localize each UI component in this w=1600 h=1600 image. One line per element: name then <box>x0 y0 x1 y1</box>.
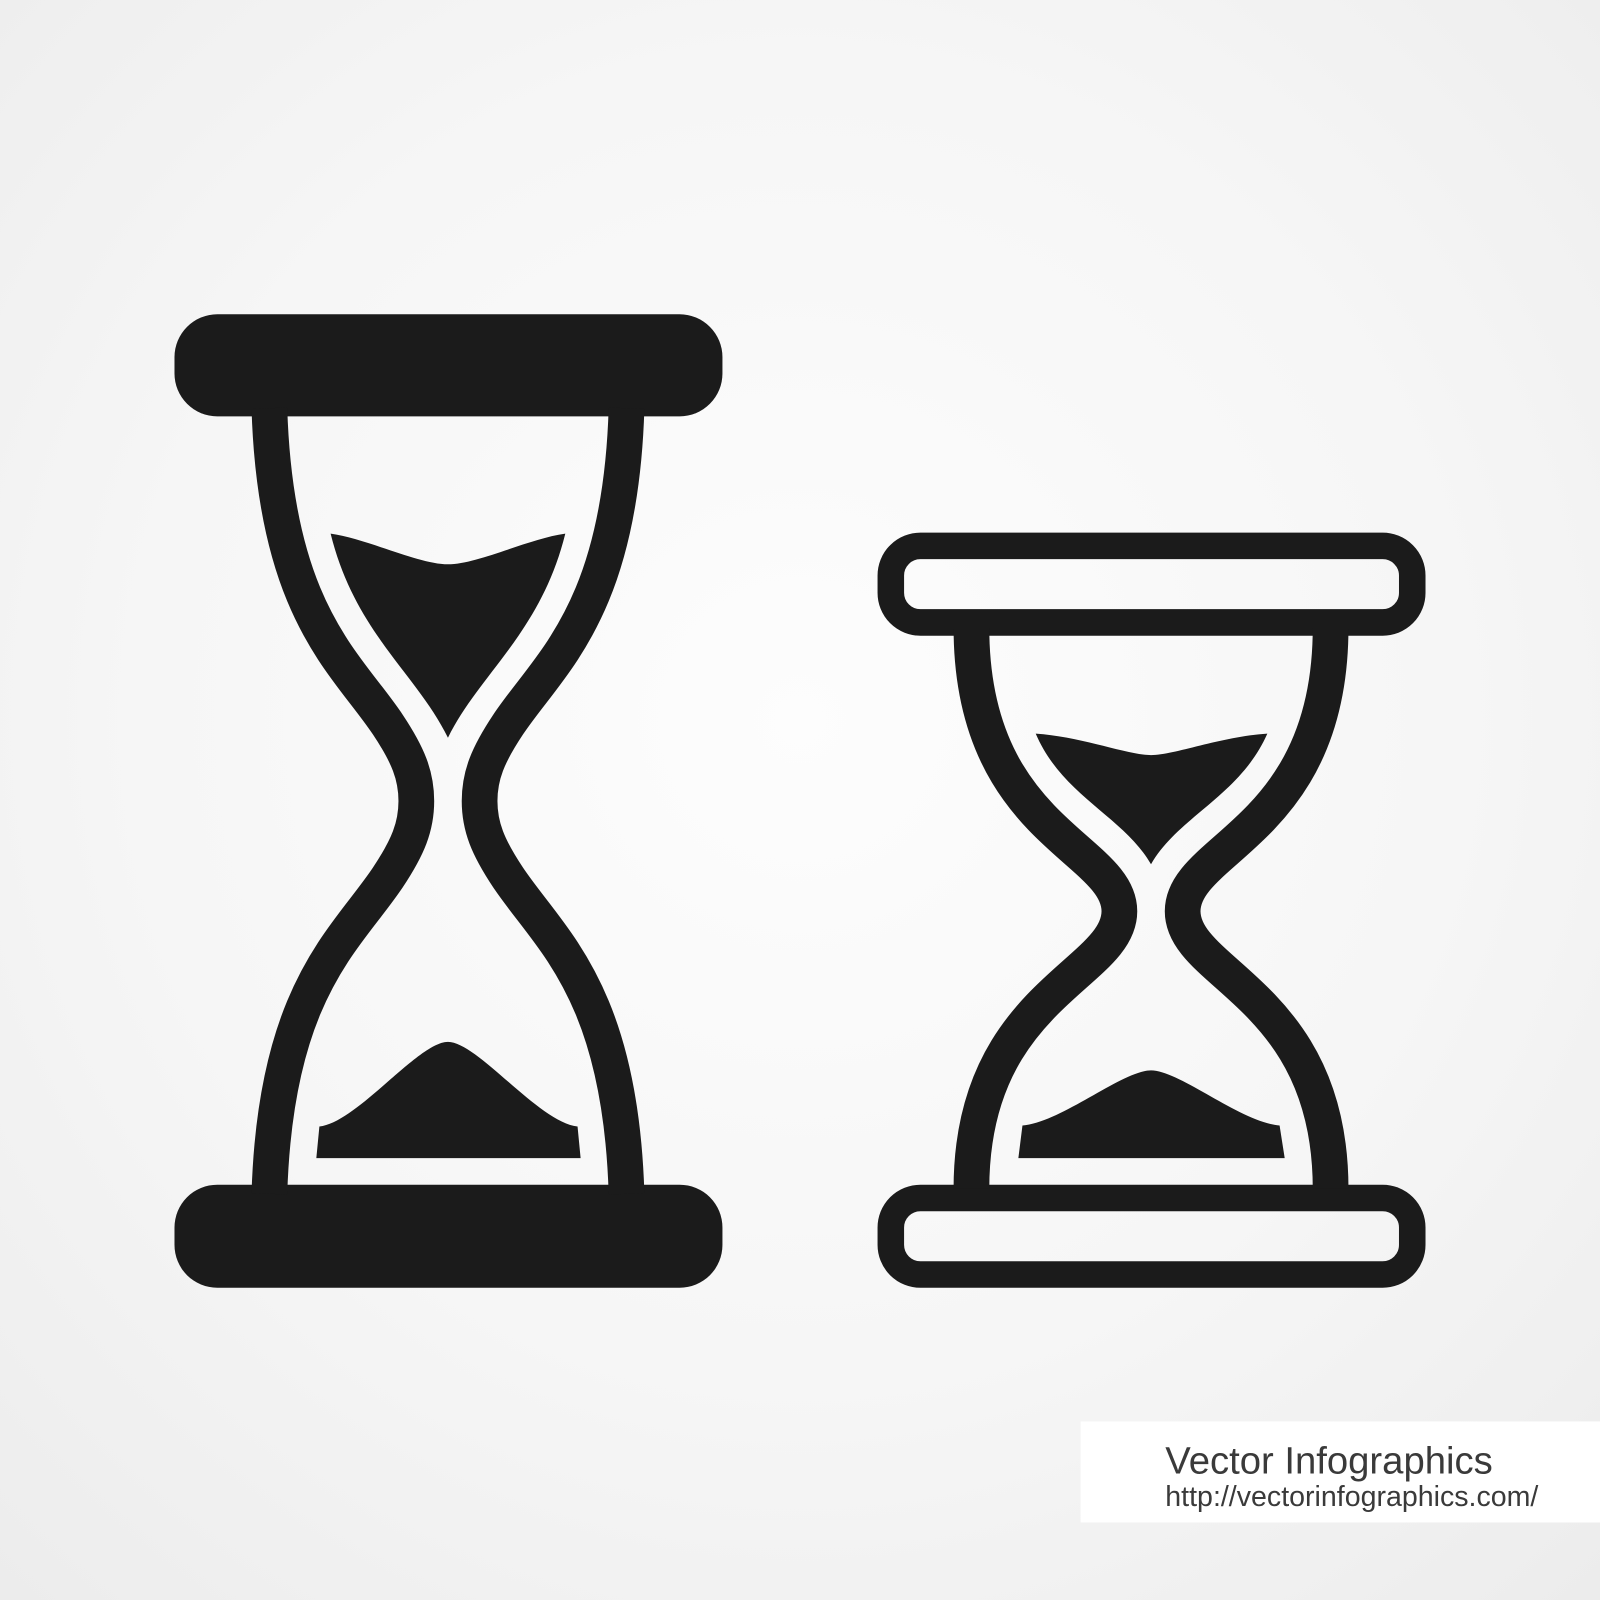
watermark <box>1081 1421 1600 1522</box>
icon: outline hourglass <box>891 546 1412 1274</box>
icon: solid hourglass <box>174 314 722 1288</box>
watermark: http://vectorinfographics.com/ <box>1165 1481 1538 1513</box>
watermark: Vector Infographics <box>1165 1439 1493 1482</box>
